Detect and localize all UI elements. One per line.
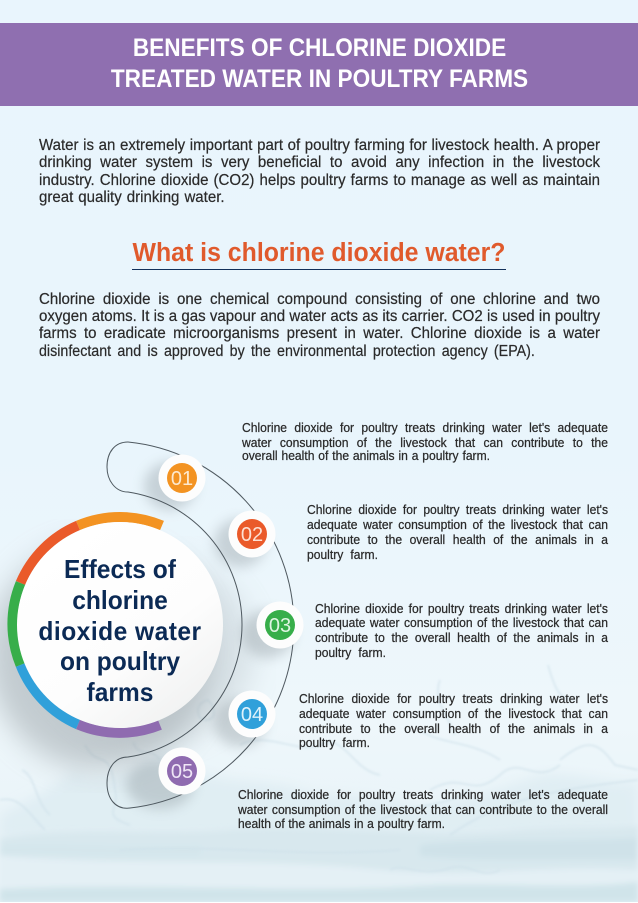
effect text 02: poultry farm. xyxy=(307,547,378,562)
effect text 01 xyxy=(242,420,608,463)
badge 05: 05 xyxy=(171,761,193,783)
effect text 02: contribute to the overall health of the animals in a xyxy=(307,532,608,547)
ring segments xyxy=(12,517,162,733)
effect text 03: poultry farm. xyxy=(315,645,386,660)
effect text 04: contribute to the overall health of the animals in a xyxy=(299,721,608,736)
effect text 05: health of the animals in a poultry farm. xyxy=(238,816,445,831)
effect text 02: adequate water consumption of the livestock that can xyxy=(307,517,608,532)
effect text 05: Chlorine dioxide for poultry treats drinking water let's adequate xyxy=(238,787,608,802)
definition paragraph: oxygen atoms. It is a gas vapour and water acts as its carrier. CO2 is used in poultry xyxy=(39,308,600,325)
badge 02 xyxy=(228,510,276,558)
intro paragraph: industry. Chlorine dioxide (CO2) helps poultry farms to manage as well as maintain xyxy=(39,172,600,189)
badge 04: 04 xyxy=(241,704,263,726)
badge 02: 02 xyxy=(241,524,263,546)
intro paragraph: great quality drinking water. xyxy=(39,189,225,206)
definition paragraph xyxy=(39,291,600,360)
badge shadows xyxy=(126,462,294,809)
effect text 03: contribute to the overall health of the animals in a xyxy=(315,630,608,645)
effect text 03: adequate water consumption of the livestock that can xyxy=(315,615,608,630)
splash strokes xyxy=(0,665,638,873)
badge 01: 01 xyxy=(171,468,193,490)
circle title: on poultry xyxy=(60,646,180,676)
splash haze xyxy=(0,750,638,840)
intro paragraph: Water is an extremely important part of poultry farming for livestock health. A proper xyxy=(39,137,600,154)
circle title: farms xyxy=(87,677,153,707)
badge 03 xyxy=(256,602,304,648)
circle title xyxy=(38,554,202,707)
effect text 04 xyxy=(299,691,608,750)
circle shadow xyxy=(0,542,212,770)
effect text 01: water consumption of the livestock that can contribute to the xyxy=(242,435,608,450)
intro paragraph: drinking water system is very beneficial to avoid any infection in the livestock xyxy=(39,154,600,171)
effect text 05 xyxy=(238,787,608,831)
circle title: dioxide water xyxy=(38,616,202,646)
effect text 05: water consumption of the livestock that can contribute to the overall xyxy=(238,802,608,817)
circle title: chlorine xyxy=(72,585,168,615)
intro paragraph xyxy=(39,137,600,206)
badge 05 xyxy=(158,748,206,794)
effect text 01: Chlorine dioxide for poultry treats drinking water let's adequate xyxy=(242,420,608,435)
header banner xyxy=(0,23,638,106)
effect text 04: adequate water consumption of the livestock that can xyxy=(299,706,608,721)
white central disc xyxy=(17,522,223,728)
water surface bands xyxy=(0,826,638,902)
circle title: Effects of xyxy=(64,554,176,584)
connector loop xyxy=(107,442,294,808)
effect text 01: overall health of the animals in a poultry farm. xyxy=(242,448,490,463)
definition paragraph: Chlorine dioxide is one chemical compound consisting of one chlorine and two xyxy=(39,291,600,308)
effect text 04: Chlorine dioxide for poultry treats drinking water let's xyxy=(299,691,608,706)
title: BENEFITS OF CHLORINE DIOXIDE xyxy=(132,34,506,62)
title xyxy=(110,34,528,93)
effect text 03: Chlorine dioxide for poultry treats drinking water let's xyxy=(315,601,608,616)
section heading: What is chlorine dioxide water? xyxy=(133,239,505,267)
effect text 02 xyxy=(307,502,608,562)
effect text 02: Chlorine dioxide for poultry treats drinking water let's xyxy=(307,502,608,517)
badge 01 xyxy=(158,454,206,502)
definition paragraph: farms to eradicate microorganisms present in water. Chlorine dioxide is a water xyxy=(39,325,600,342)
badge 04 xyxy=(228,690,276,738)
effect text 04: poultry farm. xyxy=(299,735,370,750)
definition paragraph: disinfectant and is approved by the environmental protection agency (EPA). xyxy=(39,343,535,360)
badge 03: 03 xyxy=(269,615,291,637)
title: TREATED WATER IN POULTRY FARMS xyxy=(110,65,528,93)
effect text 03 xyxy=(315,601,608,660)
